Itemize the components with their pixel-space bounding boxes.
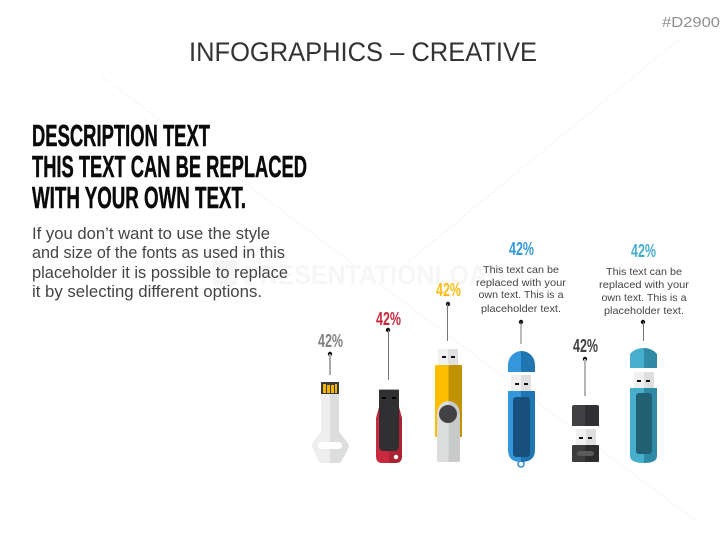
blue pointer <box>519 320 523 344</box>
blue percentage: 42% <box>509 239 534 259</box>
title: INFOGRAPHICS – CREATIVE <box>189 37 537 67</box>
USB item 1: grey key <box>312 331 349 463</box>
grey pointer <box>328 352 332 375</box>
description text: and size of the fonts as used in this <box>32 243 285 262</box>
heading <box>32 118 307 215</box>
description text: If you don’t want to use the style <box>32 224 270 243</box>
teal caption: This text can be <box>606 266 682 278</box>
teal percentage: 42% <box>631 241 656 261</box>
heading: WITH YOUR OWN TEXT. <box>32 180 246 215</box>
swivel drive <box>435 349 462 462</box>
heading: DESCRIPTION TEXT <box>32 118 210 153</box>
blue caption: replaced with your <box>476 277 567 289</box>
watermark: PRESENTATIONLOAD <box>243 260 505 290</box>
description text: placeholder it is possible to replace <box>32 263 288 282</box>
USB item 5: black <box>572 336 599 462</box>
blue caption <box>476 264 567 315</box>
red drive <box>376 389 402 463</box>
description text <box>32 224 288 301</box>
black drive <box>572 405 599 462</box>
red percentage: 42% <box>376 309 401 329</box>
description text: it by selecting different options. <box>32 282 262 301</box>
yellow pointer <box>446 302 450 341</box>
USB item 3: yellow swivel <box>435 280 462 462</box>
teal drive <box>630 348 657 463</box>
teal caption: own text. This is a <box>602 292 687 304</box>
heading: THIS TEXT CAN BE REPLACED <box>32 149 307 184</box>
USB item 2: red <box>376 309 402 463</box>
yellow percentage: 42% <box>436 280 461 300</box>
teal caption <box>599 266 690 317</box>
blue caption: placeholder text. <box>481 303 561 315</box>
teal pointer <box>641 320 645 341</box>
blue caption: own text. This is a <box>478 289 564 301</box>
teal caption: placeholder text. <box>604 305 684 317</box>
blue caption: This text can be <box>483 264 559 276</box>
dark pointer <box>583 357 587 396</box>
blue drive <box>508 351 535 467</box>
USB item 4: blue <box>476 239 567 467</box>
product code: #D2900 <box>662 14 720 31</box>
red pointer <box>386 328 390 380</box>
grey percentage: 42% <box>318 331 343 351</box>
dark percentage: 42% <box>573 336 598 356</box>
key drive <box>312 382 349 463</box>
teal caption: replaced with your <box>599 279 690 291</box>
USB item 6: teal <box>599 241 690 463</box>
